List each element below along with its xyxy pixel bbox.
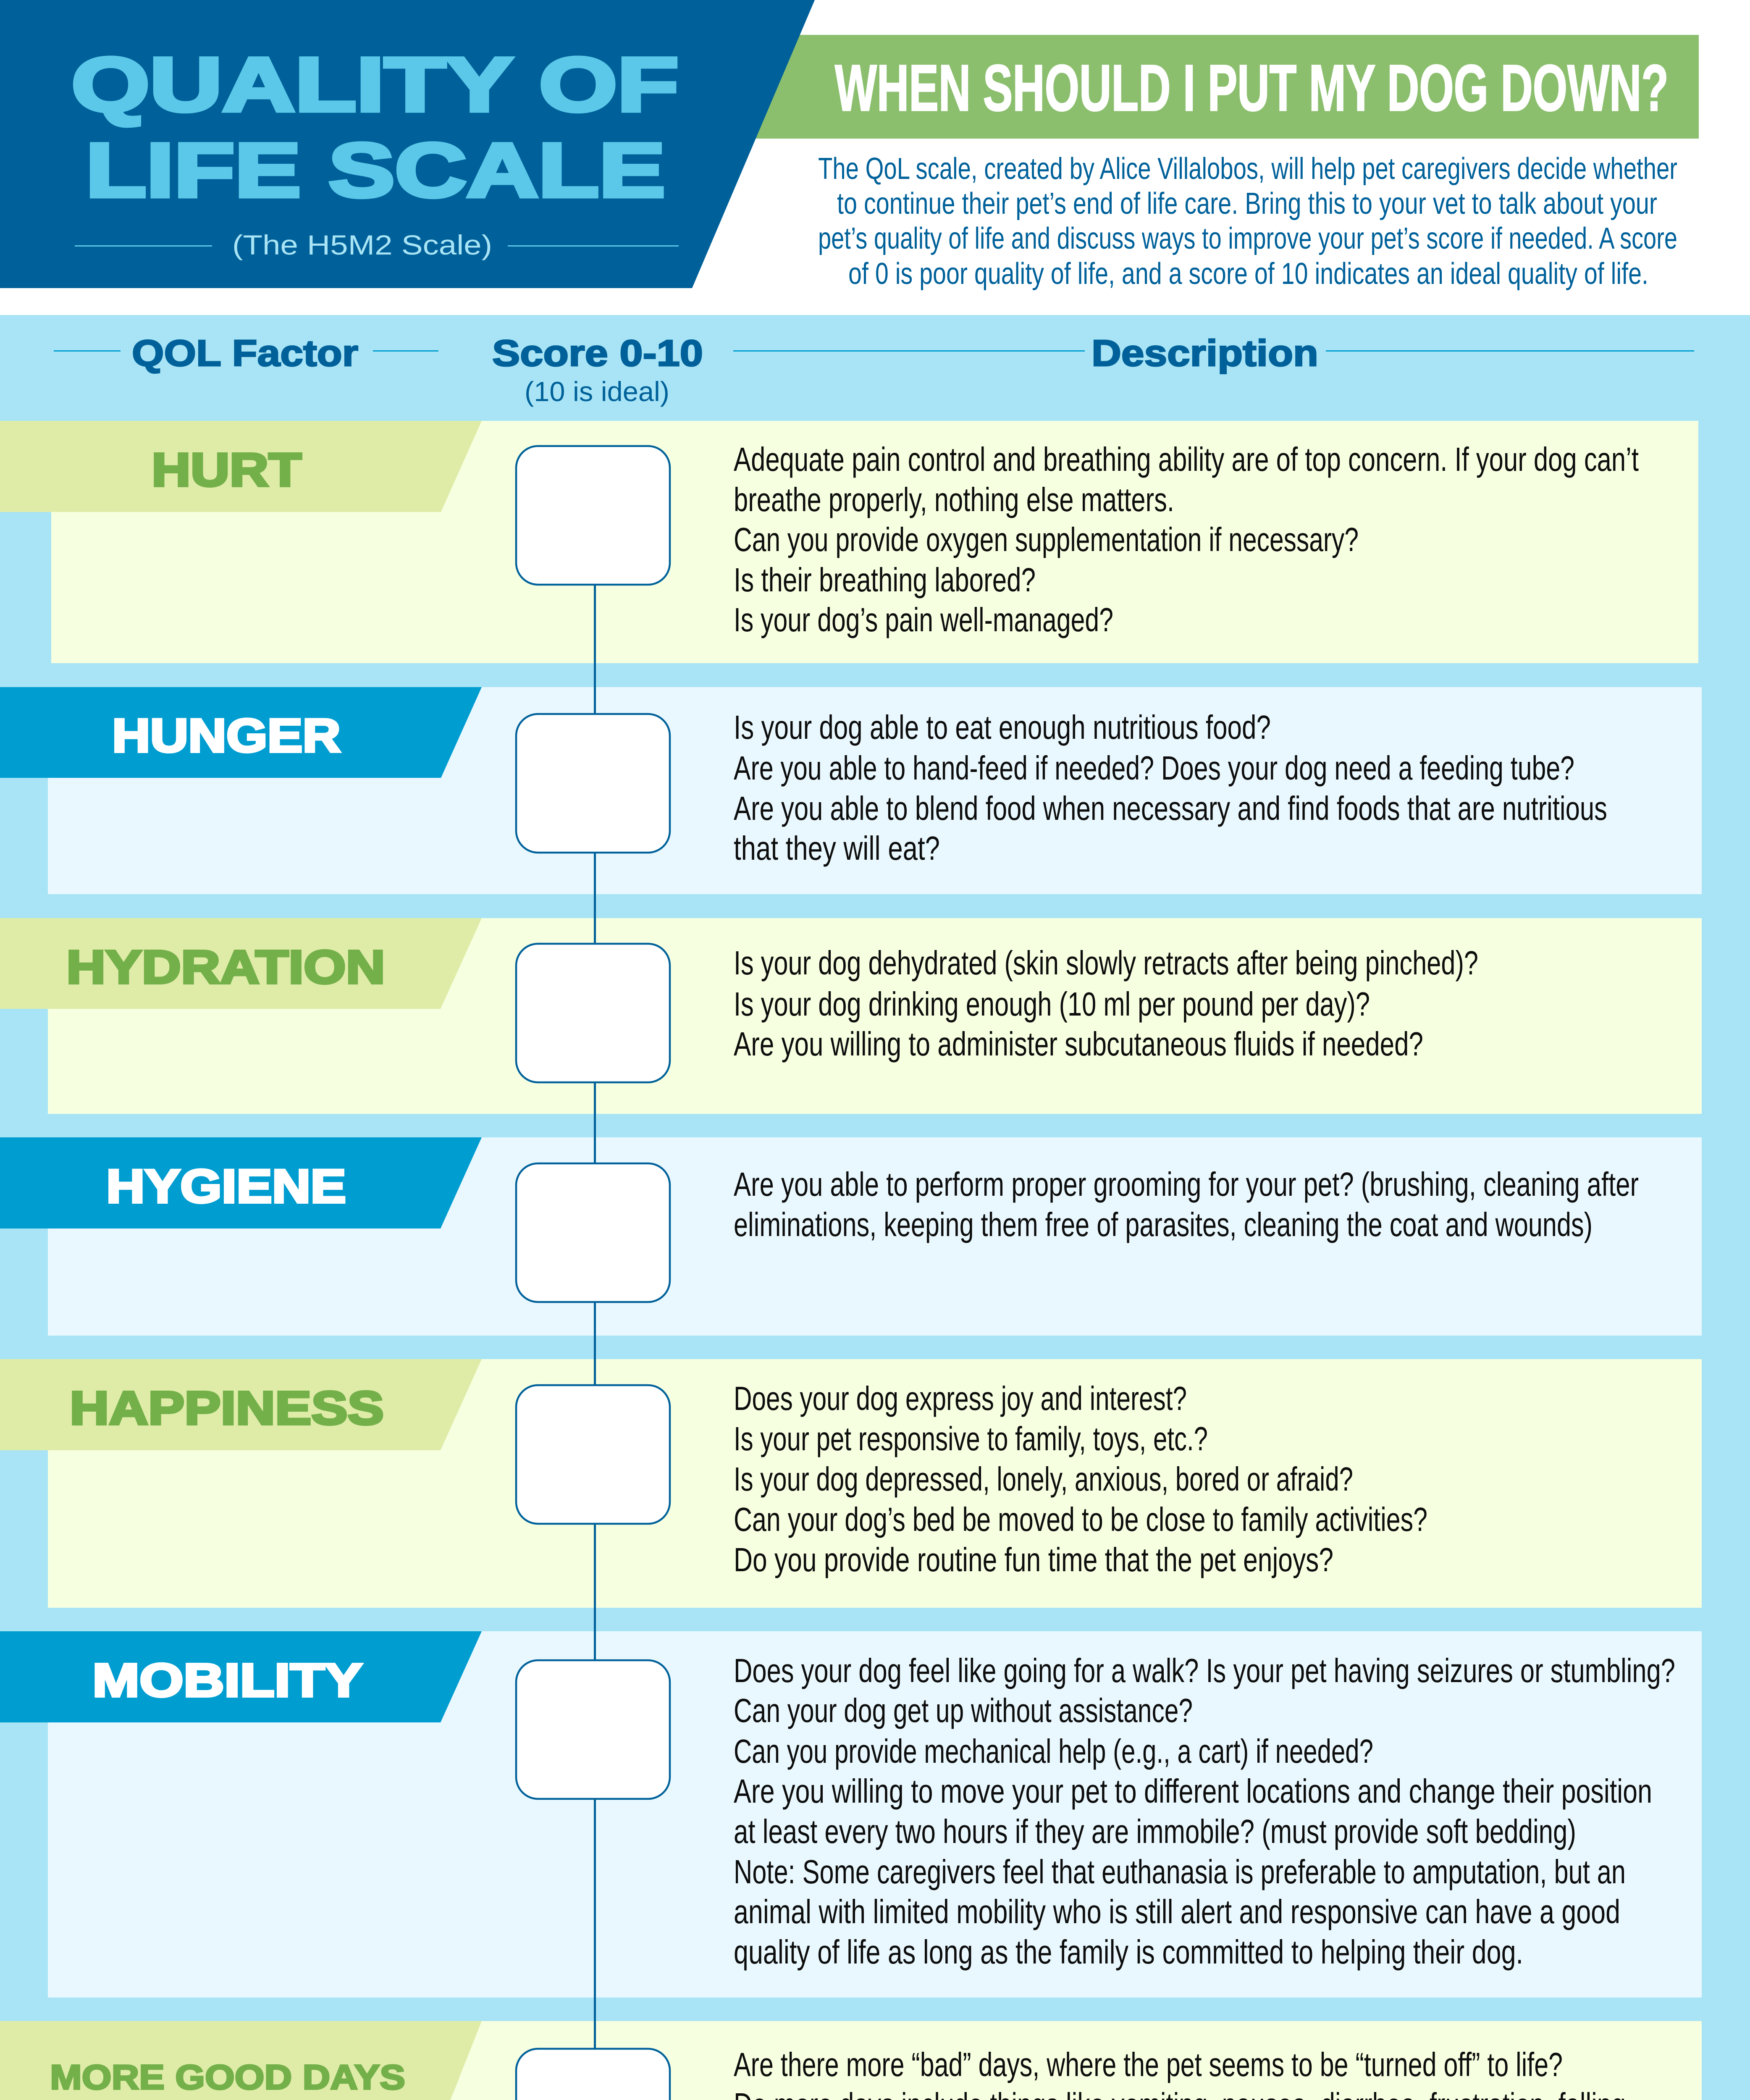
description: happiness: Does your dog express joy and interest?: [734, 1380, 1187, 1417]
label: more good days than bad: MORE GOOD DAYS: [50, 2058, 405, 2097]
title: quality of life scale: QUALITY OF: [71, 42, 679, 127]
description: hydration: Is your dog drinking enough (10 ml per pound per day)?: [734, 985, 1370, 1023]
description: mobility: Can your dog get up without assistance?: [734, 1692, 1193, 1729]
description: hunger: that they will eat?: [734, 830, 940, 867]
title: quality of life scale: [71, 42, 679, 213]
arrow: connector line to total: [579, 584, 611, 2100]
description: happiness: Do you provide routine fun time that the pet enjoys?: [734, 1541, 1333, 1578]
subtitle with rules: [75, 229, 679, 260]
description: more good days than bad: [734, 2046, 1658, 2100]
panel: more good days than bad: [0, 2021, 1702, 2100]
panel: hygiene: [0, 1137, 1702, 1336]
description: happiness: [734, 1380, 1427, 1578]
label: happiness: HAPPINESS: [70, 1382, 384, 1434]
description: hygiene: [734, 1166, 1639, 1243]
description: mobility: quality of life as long as the family is committed to helping their dog.: [734, 1933, 1523, 1971]
description: mobility: Can you provide mechanical help (e.g., a cart) if needed?: [734, 1732, 1373, 1770]
column headers: (10 is ideal): [525, 376, 669, 407]
description: hurt: Can you provide oxygen supplementation if necessary?: [734, 521, 1359, 558]
title panel: [0, 0, 815, 288]
description: hurt: Is your dog’s pain well-managed?: [734, 601, 1113, 638]
description: hurt: Is their breathing labored?: [734, 561, 1036, 598]
panel: happiness: [0, 1359, 1702, 1608]
label: mobility: MOBILITY: [92, 1654, 362, 1706]
panel: mobility: [0, 1631, 1702, 1998]
label: hurt: HURT: [152, 444, 302, 496]
description: hurt: breathe properly, nothing else matters.: [734, 481, 1174, 518]
panel: hunger: [0, 687, 1702, 894]
label: hunger: HUNGER: [112, 709, 341, 762]
label: hydration: HYDRATION: [66, 941, 385, 993]
description: mobility: [734, 1652, 1675, 1971]
description: happiness: Can your dog’s bed be moved to be close to family activities?: [734, 1501, 1427, 1538]
label: hygiene: HYGIENE: [106, 1160, 346, 1213]
column headers: QOL Factor: [132, 332, 358, 374]
description: happiness: Is your pet responsive to family, toys, etc.?: [734, 1420, 1208, 1457]
score boxes: [516, 446, 670, 2100]
description: happiness: Is your dog depressed, lonely, anxious, bored or afraid?: [734, 1460, 1353, 1498]
description: hydration: Are you willing to administer subcutaneous fluids if needed?: [734, 1025, 1423, 1063]
column headers: Description: [1091, 332, 1318, 374]
panel: hydration: [0, 918, 1702, 1114]
green headline bar: [756, 35, 1699, 139]
description: hunger: [734, 709, 1607, 867]
description: hydration: Is your dog dehydrated (skin slowly retracts after being pinched)?: [734, 944, 1478, 982]
description: hurt: [734, 441, 1639, 638]
description: hunger: Is your dog able to eat enough nutritious food?: [734, 709, 1271, 746]
title: quality of life scale: LIFE SCALE: [86, 127, 665, 213]
subtitle with rules: (The H5M2 Scale): [232, 229, 492, 260]
description: hydration: [734, 944, 1478, 1063]
column headers: Score 0-10: [492, 332, 703, 374]
intro paragraph: [818, 152, 1677, 291]
column headers: [54, 332, 1694, 407]
panel: hurt: [0, 421, 1698, 663]
